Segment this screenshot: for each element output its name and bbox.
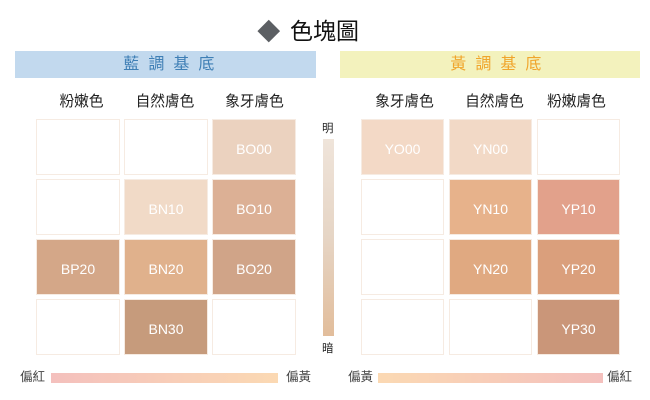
swatch BO10 — [212, 179, 296, 235]
panel header: yellow undertone: 黃 調 基 底 — [450, 56, 544, 73]
swatch YN20: YN20 — [473, 261, 508, 277]
empty swatch — [361, 179, 444, 235]
swatch BN10 — [124, 179, 208, 235]
swatch YP20: YP20 — [561, 261, 596, 277]
panel header: yellow undertone — [340, 51, 640, 78]
swatch BO00 — [212, 119, 296, 175]
column heading: pink right: 粉嫩膚色 — [547, 94, 606, 110]
label: yellowish: 偏黃 — [348, 370, 373, 384]
swatch YP30 — [537, 299, 620, 355]
swatch YO00: YO00 — [385, 141, 420, 157]
hue scale: blue undertone — [20, 370, 311, 384]
swatch BN30 — [124, 299, 208, 355]
label: reddish: 偏紅 — [607, 370, 632, 384]
empty swatch — [537, 119, 620, 175]
swatch YN10: YN10 — [473, 201, 508, 217]
swatch BO00: BO00 — [236, 141, 272, 157]
swatch BO20: BO20 — [236, 261, 272, 277]
hue gradient bar — [378, 373, 603, 383]
title — [258, 18, 359, 44]
column heading: pink left: 粉嫩色 — [59, 94, 104, 110]
empty swatch — [36, 119, 120, 175]
brightness scale — [322, 122, 334, 355]
hue scale: yellow undertone — [348, 370, 632, 384]
swatch grid: yellow undertone — [361, 119, 620, 355]
empty swatch — [36, 179, 120, 235]
label: dark: 暗 — [322, 343, 334, 355]
swatch BP20 — [36, 239, 120, 295]
empty swatch — [36, 299, 120, 355]
label: bright: 明 — [322, 123, 334, 135]
column heading: natural left: 自然膚色 — [136, 94, 194, 110]
label: reddish: 偏紅 — [20, 370, 45, 384]
swatch YP30: YP30 — [561, 321, 596, 337]
empty swatch — [212, 299, 296, 355]
swatch grid: blue undertone — [36, 119, 296, 355]
title text: 色塊圖 — [290, 18, 359, 44]
hue gradient bar — [51, 373, 278, 383]
panel header: blue undertone: 藍 調 基 底 — [123, 56, 217, 73]
swatch BP20: BP20 — [61, 261, 95, 277]
empty swatch — [449, 299, 532, 355]
swatch YO00 — [361, 119, 444, 175]
swatch BN20: BN20 — [148, 261, 184, 277]
swatch BN30: BN30 — [148, 321, 184, 337]
swatch BN20 — [124, 239, 208, 295]
empty swatch — [361, 239, 444, 295]
icon: diamond — [258, 20, 280, 42]
column heading: ivory right: 象牙膚色 — [375, 94, 434, 110]
empty swatch — [124, 119, 208, 175]
swatch YP10: YP10 — [561, 201, 596, 217]
swatch YN10 — [449, 179, 532, 235]
brightness gradient bar — [322, 139, 334, 336]
swatch YP10 — [537, 179, 620, 235]
empty swatch — [361, 299, 444, 355]
swatch YP20 — [537, 239, 620, 295]
swatch BO20 — [212, 239, 296, 295]
swatch BO10: BO10 — [236, 201, 272, 217]
swatch YN00 — [449, 119, 532, 175]
panel header: blue undertone — [15, 51, 316, 78]
column heading: natural right: 自然膚色 — [465, 94, 524, 110]
swatch YN20 — [449, 239, 532, 295]
label: yellowish: 偏黃 — [286, 370, 311, 384]
column heading: ivory left: 象牙膚色 — [225, 94, 284, 110]
swatch YN00: YN00 — [473, 141, 508, 157]
swatch BN10: BN10 — [148, 201, 184, 217]
